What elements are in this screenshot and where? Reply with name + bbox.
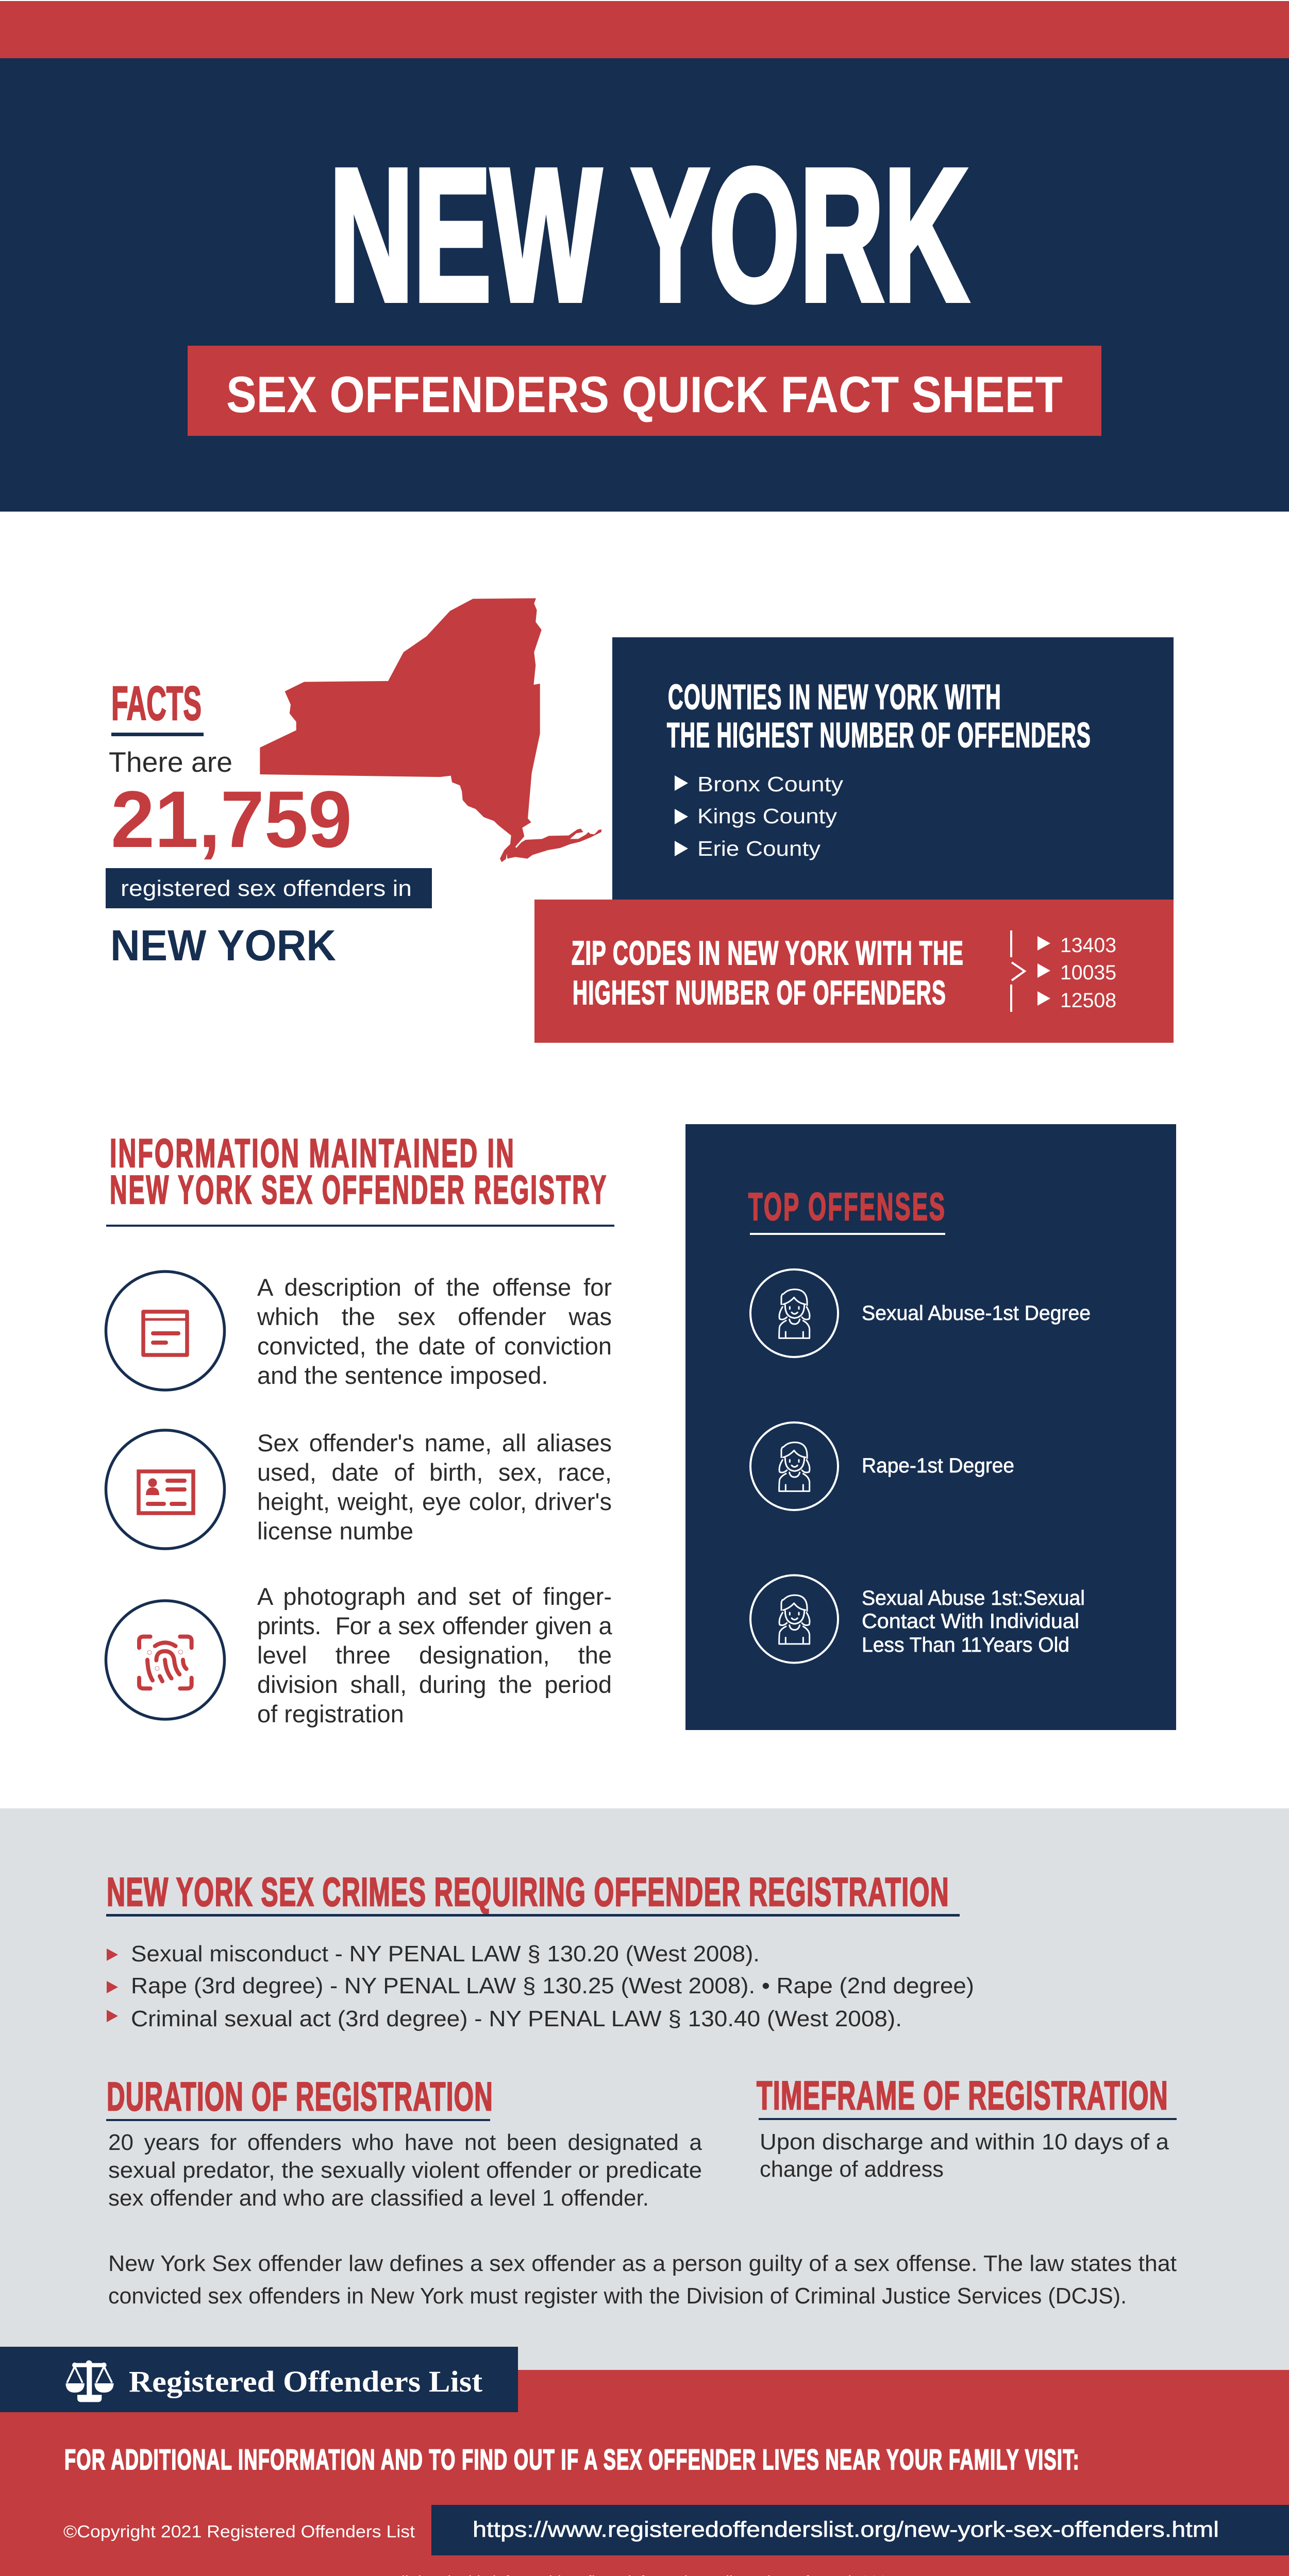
- text: offense 2: Rape-1st Degree: [862, 1454, 1014, 1477]
- text: duration: sex offender and who are classified a level 1 offender.: [108, 2185, 649, 2211]
- banner: registered sex offenders in: [106, 868, 432, 908]
- heading: zip codes: HIGHEST NUMBER OF OFFENDERS: [573, 974, 946, 1011]
- heading: information maintained: INFORMATION MAINTAINED IN: [110, 1130, 515, 1176]
- icon: id card: [106, 1430, 225, 1549]
- heading: top offenses: TOP OFFENSES: [748, 1185, 946, 1228]
- logo: Registered Offenders List: [129, 2365, 483, 2398]
- copyright: ©Copyright 2021 Registered Offenders List: [63, 2522, 415, 2541]
- text: offense description: which the sex offender was: [257, 1303, 612, 1330]
- list: counties: Erie County: [697, 837, 821, 860]
- list: zip codes: 12508: [1060, 989, 1116, 1012]
- panel: zip codes: [534, 900, 1174, 1043]
- panel: facts: [106, 598, 601, 970]
- heading: zip codes: ZIP CODES IN NEW YORK WITH THE: [572, 934, 964, 972]
- heading: zip codes: [572, 934, 964, 1011]
- text: photograph and fingerprints: A photograph and set of finger-: [257, 1583, 612, 1610]
- panel: information maintained: [106, 1130, 618, 1736]
- text: offense 3: Contact With Individual: [862, 1610, 1079, 1633]
- panel: header: [0, 1, 1289, 512]
- url banner: [431, 2505, 1289, 2555]
- text: photograph and fingerprints: division shall, during the period: [257, 1671, 612, 1698]
- list: zip codes: 10035: [1060, 961, 1116, 984]
- text: offense description: [257, 1273, 618, 1396]
- text: personal details: license numbe: [257, 1517, 413, 1545]
- subtitle banner: [188, 346, 1101, 436]
- text: timeframe: change of address: [760, 2157, 944, 2182]
- text: duration: 20 years for offenders who have not been designated a: [108, 2130, 702, 2155]
- text: photograph and fingerprints: [257, 1582, 618, 1736]
- heading: information maintained: NEW YORK SEX OFFENDER REGISTRY: [110, 1167, 608, 1212]
- heading: information maintained: [110, 1130, 608, 1212]
- icon: scales of justice: [65, 2360, 114, 2402]
- heading: counties: [667, 677, 1091, 755]
- icon: fingerprint: [106, 1601, 225, 1719]
- heading: counties: COUNTIES IN NEW YORK WITH: [668, 677, 1001, 717]
- banner: registered sex offenders in: registered sex offenders in: [121, 876, 412, 901]
- list: sex crimes: Criminal sexual act (3rd degree) - NY PENAL LAW § 130.40 (West 2008).: [131, 2006, 902, 2031]
- icon: person 1: [750, 1269, 838, 1357]
- text: personal details: [257, 1428, 618, 1552]
- panel: top offenses: [685, 1124, 1176, 1730]
- text: photograph and fingerprints: level three designation, the: [257, 1641, 612, 1669]
- list: counties: Kings County: [697, 804, 838, 828]
- icon: person 3: [750, 1575, 838, 1663]
- map of New York state: [260, 598, 601, 862]
- heading: facts: FACTS: [111, 676, 202, 730]
- big number: 21,759: [111, 775, 352, 865]
- text: timeframe: [760, 2129, 1169, 2182]
- text: personal details: Sex offender's name, all aliases: [257, 1429, 612, 1456]
- heading: duration: DURATION OF REGISTRATION: [107, 2074, 493, 2119]
- panel: registration requirements: [0, 1808, 1289, 2370]
- text: offense description: and the sentence imposed.: [257, 1362, 548, 1389]
- text: photograph and fingerprints: of registration: [257, 1700, 404, 1727]
- url banner: https://www.registeredoffenderslist.org/new-york-sex-offenders.html: [473, 2517, 1219, 2542]
- text: there are: There are: [109, 746, 232, 778]
- state name: NEW YORK: [110, 921, 336, 970]
- icon: person 2: [750, 1422, 838, 1510]
- text: offense 3: Less Than 11Years Old: [862, 1634, 1069, 1656]
- text: photograph and fingerprints: prints. For a sex offender given a: [257, 1612, 612, 1639]
- text: timeframe: Upon discharge and within 10 days of a: [760, 2129, 1169, 2155]
- list: sex crimes: [107, 1941, 974, 2031]
- text: offense 3: [862, 1587, 1085, 1656]
- text: offense description: convicted, the date of conviction: [257, 1332, 612, 1360]
- icon: document: [106, 1272, 225, 1390]
- text: law definition: [108, 2251, 1177, 2309]
- panel: counties: [612, 637, 1174, 900]
- list: sex crimes: Sexual misconduct - NY PENAL LAW § 130.20 (West 2008).: [131, 1941, 760, 1967]
- logo: [0, 2347, 518, 2412]
- text: law definition: convicted sex offenders in New York must register with the Division of Criminal Justice Services (DCJS).: [108, 2283, 1127, 2309]
- list: zip codes: 13403: [1060, 934, 1116, 957]
- text: personal details: height, weight, eye color, driver's: [257, 1488, 612, 1515]
- text: personal details: used, date of birth, sex, race,: [257, 1459, 612, 1486]
- panel: footer: [0, 2347, 1289, 2576]
- text: duration: sexual predator, the sexually violent offender or predicate: [108, 2158, 702, 2183]
- text: offense 3: Sexual Abuse 1st:Sexual: [862, 1587, 1085, 1609]
- text: law definition: New York Sex offender law defines a sex offender as a person guilty of a sex offense. The law states that: [108, 2251, 1177, 2276]
- list: sex crimes: Rape (3rd degree) - NY PENAL LAW § 130.25 (West 2008). • Rape (2nd degree): [131, 1973, 974, 1998]
- list: counties: [675, 772, 844, 860]
- subtitle banner: SEX OFFENDERS QUICK FACT SHEET: [226, 366, 1063, 423]
- text: duration: [108, 2129, 706, 2211]
- text: offense description: A description of the offense for: [257, 1274, 612, 1301]
- divider with chevron: [1011, 930, 1025, 1012]
- list: zip codes: [1037, 934, 1116, 1012]
- text: offense 1: Sexual Abuse-1st Degree: [862, 1302, 1091, 1325]
- list: counties: Bronx County: [697, 772, 844, 796]
